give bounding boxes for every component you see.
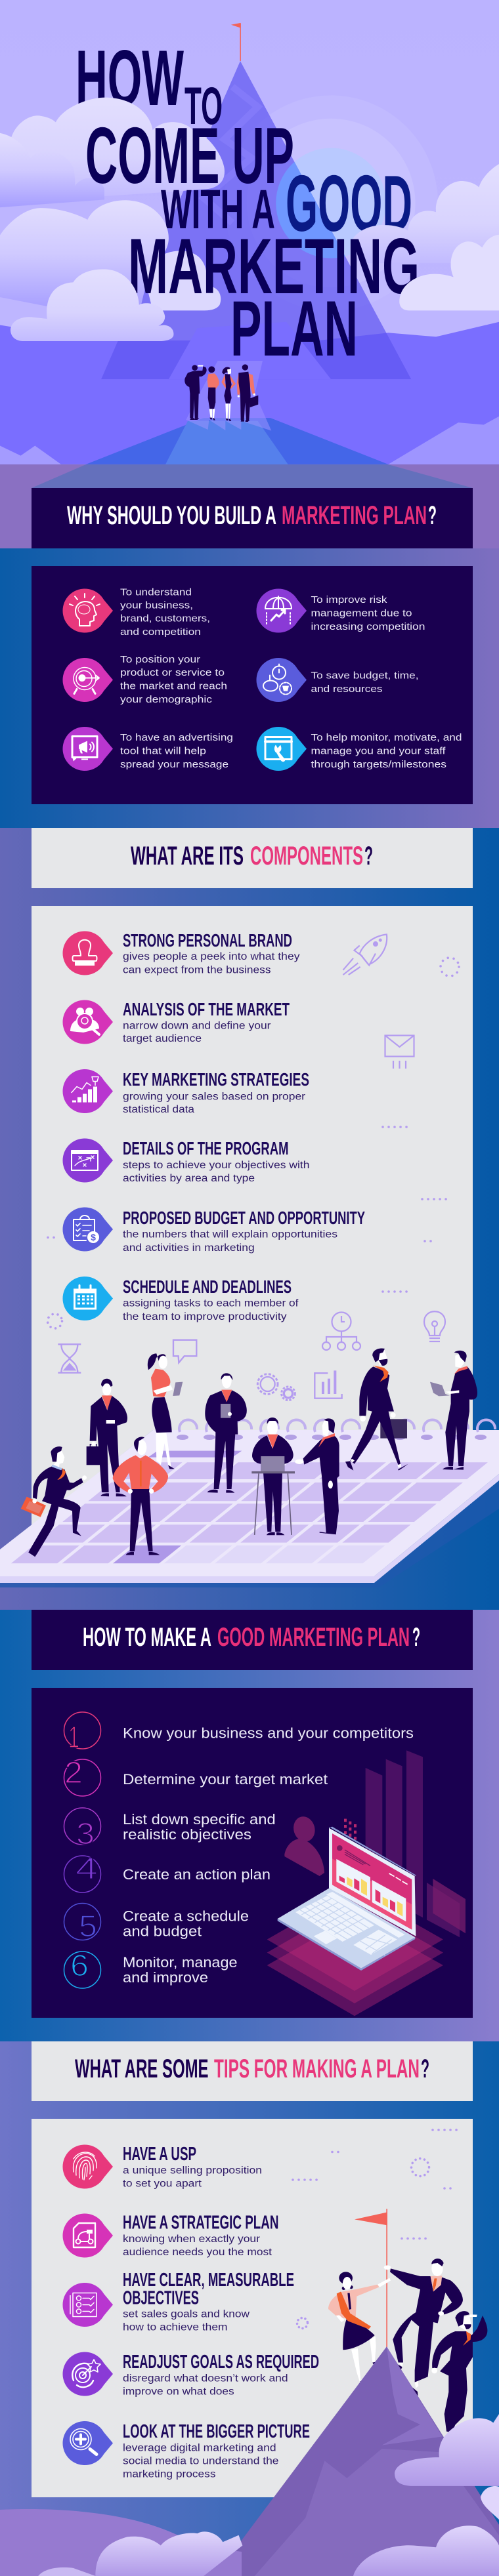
tip: strategic plan <box>63 2212 278 2258</box>
component text: statistical data <box>123 1104 194 1115</box>
reason text: To help monitor, motivate, and <box>311 732 462 743</box>
clouds: lower left and right <box>11 235 499 341</box>
step 6 <box>64 1948 238 1988</box>
component text: growing your sales based on proper <box>123 1092 305 1102</box>
icon: rocket <box>343 934 387 975</box>
tip text: knowing when exactly your <box>123 2234 260 2245</box>
component text: the team to improve productivity <box>123 1311 287 1322</box>
step 6: Monitor, manage <box>123 1954 238 1971</box>
tip text <box>123 2270 294 2333</box>
step 4: 4 <box>76 1851 98 1885</box>
component text: steps to achieve your objectives with <box>123 1160 310 1171</box>
step 2 <box>64 1755 328 1796</box>
panel: components <box>32 906 473 1525</box>
component text: can expect from the business <box>123 964 271 976</box>
calendar platform <box>0 1420 499 1587</box>
tip text <box>123 2421 310 2480</box>
spiral binding rings <box>177 1420 495 1440</box>
tip: measurable objectives <box>63 2270 294 2333</box>
component: details of the program <box>63 1138 310 1184</box>
tip text: set sales goals and know <box>123 2309 250 2320</box>
reason text <box>311 670 419 695</box>
tip: readjust goals <box>63 2352 319 2397</box>
reason text: spread your message <box>120 759 228 770</box>
heading: what are its components: ? <box>364 842 373 870</box>
background band: purple strip under hero <box>0 464 499 548</box>
icon: org chart with clock <box>322 1312 360 1350</box>
tip text: LOOK AT THE BIGGER PICTURE <box>123 2421 310 2442</box>
bottom hill <box>0 2509 242 2576</box>
background band: section 3 gradient <box>0 1610 499 2041</box>
calendar shadow <box>0 1481 499 1587</box>
laptop screen <box>329 1827 416 1936</box>
step 3 <box>64 1808 276 1850</box>
tip text: leverage digital marketing and <box>123 2443 276 2453</box>
flag <box>355 2209 387 2348</box>
people and flag on summit <box>328 2209 463 2396</box>
step 4: Create an action plan <box>123 1866 271 1883</box>
man shading eyes <box>184 365 207 420</box>
component: strong personal brand <box>63 930 300 976</box>
icon: rising bars with trophy <box>63 1069 113 1113</box>
calendar grid <box>11 1451 488 1563</box>
icon: flow document <box>63 2213 113 2258</box>
icon: umbrella and arrow <box>256 589 307 632</box>
hero scene: sky, sun and mountain <box>0 0 499 464</box>
heading: what are some tips: ? <box>421 2055 429 2083</box>
component text: KEY MARKETING STRATEGIES <box>123 1069 309 1090</box>
heading: why should you build a marketing plan: WHY SHOULD YOU BUILD A <box>67 501 276 530</box>
reason: advertising tool <box>63 727 233 771</box>
reason text: the market and reach <box>120 681 227 691</box>
step 3: List down specific and <box>123 1811 276 1828</box>
tip text: to set you apart <box>123 2178 202 2190</box>
icon: bar chart <box>315 1370 342 1399</box>
reason text: To have an advertising <box>120 732 233 743</box>
clouds: middle left and right <box>0 164 499 310</box>
man shaking hands <box>295 1418 339 1534</box>
heading: what are its components: COMPONENTS <box>250 842 363 870</box>
step 1 <box>64 1712 414 1754</box>
tip text <box>123 2352 319 2397</box>
man walking with briefcase <box>345 1349 408 1471</box>
tip text <box>123 2144 262 2190</box>
icon: strategy board <box>63 1139 113 1182</box>
reason text <box>120 586 210 638</box>
icon: magnifier with plus <box>63 2421 113 2465</box>
woman with tablet <box>148 1353 183 1469</box>
component text: gives people a peek into what they <box>123 951 300 962</box>
component: schedule and deadlines <box>63 1277 299 1322</box>
heading: why should you build a marketing plan: ? <box>428 501 437 530</box>
reason text: To position your <box>120 654 200 665</box>
title: HOW TO: HOW <box>76 34 184 122</box>
trapezoid continuation of hill <box>32 464 473 488</box>
title: HOW TO: TO <box>184 77 223 136</box>
reason text: your business, <box>120 600 193 611</box>
title: HOW TO <box>76 34 223 136</box>
component text: assigning tasks to each member of <box>123 1298 299 1309</box>
reason text: To understand <box>120 586 192 598</box>
background band: section 1 gradient <box>0 548 499 828</box>
man with briefcase <box>237 364 258 422</box>
reason text <box>311 594 425 632</box>
reason text: management due to <box>311 607 412 619</box>
component text: PROPOSED BUDGET AND OPPORTUNITY <box>123 1208 365 1228</box>
calendar top <box>0 1430 499 1576</box>
component text: the numbers that will explain opportunities <box>123 1229 337 1240</box>
reason text: and resources <box>311 684 382 695</box>
tip text: HAVE CLEAR, MEASURABLE <box>123 2270 294 2291</box>
component text: ANALYSIS OF THE MARKET <box>123 999 290 1019</box>
component: analysis of the market <box>63 999 290 1044</box>
foreground mountain band <box>0 322 499 464</box>
icon: stamp <box>63 931 113 975</box>
tip text: social media to understand the <box>123 2456 278 2466</box>
tip text: a unique selling proposition <box>123 2165 262 2177</box>
icon: fingerprint <box>63 2145 113 2188</box>
tip text: improve on what does <box>123 2386 234 2397</box>
icon: envelope <box>385 1035 414 1069</box>
clouds: upper left <box>0 98 225 207</box>
bottom and side clouds <box>38 2414 499 2576</box>
reason text: product or service to <box>120 667 225 678</box>
hero hill <box>86 418 388 464</box>
component text <box>123 1138 310 1184</box>
panel: how to make steps <box>32 1688 473 2018</box>
tip text: disregard what doesn’t work and <box>123 2373 288 2384</box>
icon: gears <box>257 1374 295 1400</box>
icon: clipboard with dollar: $ <box>91 1232 96 1242</box>
reason text: To save budget, time, <box>311 670 419 681</box>
component text: target audience <box>123 1033 202 1044</box>
step 6: and improve <box>123 1969 208 1986</box>
tip text: OBJECTIVES <box>123 2288 199 2309</box>
section header: how to make: ? <box>412 1623 420 1652</box>
tip: bigger picture <box>63 2421 310 2480</box>
team on calendar: right group <box>251 1349 477 1535</box>
icon: people and magnifier <box>63 1000 113 1044</box>
background band: section 2 gradient <box>0 828 499 1610</box>
component: proposed budget <box>63 1207 365 1254</box>
reason text <box>120 654 227 705</box>
step 3: realistic objectives <box>123 1826 251 1843</box>
component text: and activities in marketing <box>123 1242 255 1254</box>
decorative dots and rings in tips panel <box>293 2130 462 2329</box>
cloud: bottom left <box>38 2567 95 2576</box>
man with tablet <box>205 1373 247 1493</box>
side hills <box>0 417 499 464</box>
background band: section 4 gradient <box>0 2041 499 2576</box>
component text: STRONG PERSONAL BRAND <box>123 930 292 951</box>
tip text: how to achieve them <box>123 2322 227 2333</box>
heading: what are its components: WHAT ARE ITS <box>131 842 244 870</box>
reason text: through targets/milestones <box>311 759 446 770</box>
tip text: audience needs you the most <box>123 2247 272 2258</box>
man running with book <box>21 1446 87 1557</box>
mountain <box>101 61 411 379</box>
reason text <box>120 732 233 770</box>
component text: activities by area and type <box>123 1173 255 1184</box>
reason text: increasing competition <box>311 621 425 632</box>
person silhouette backdrop <box>284 1814 324 1876</box>
icon: target <box>63 658 113 702</box>
man at laptop stand <box>251 1418 295 1535</box>
title: MARKETING PLAN <box>128 222 420 373</box>
component text <box>123 1208 365 1254</box>
step 1: 1 <box>68 1720 79 1754</box>
section header: why build a plan <box>32 488 473 548</box>
group of four people on hill <box>184 361 271 431</box>
reason: understand your business <box>63 586 210 638</box>
reason text: your demographic <box>120 694 213 705</box>
step 5: and budget <box>123 1923 202 1939</box>
icon: megaphone screen <box>63 727 113 771</box>
component text <box>123 1277 299 1322</box>
floor layers <box>267 1889 443 2016</box>
step 5: Create a schedule <box>123 1908 249 1925</box>
step 4 <box>64 1851 271 1892</box>
summit mountain <box>215 2346 499 2576</box>
reason text: brand, customers, <box>120 613 210 624</box>
reason text: and competition <box>120 626 201 638</box>
tip text <box>123 2212 278 2258</box>
tip: have a USP <box>63 2144 262 2190</box>
tip text: HAVE A USP <box>123 2144 196 2165</box>
component text <box>123 930 300 976</box>
icon: chat bubble <box>173 1340 196 1362</box>
cloud: right edge <box>481 2486 499 2520</box>
step 3: 3 <box>76 1816 95 1850</box>
icon: checklist <box>63 2283 113 2327</box>
sun rings <box>224 95 438 311</box>
component text <box>123 1069 309 1115</box>
component text: narrow down and define your <box>123 1021 271 1031</box>
step 2: 2 <box>64 1755 83 1789</box>
laptop illustration <box>267 1750 466 2016</box>
cloud: bottom centre <box>95 2531 242 2576</box>
team on calendar: left group <box>21 1353 247 1557</box>
icon: wrench window <box>256 727 307 771</box>
component text: DETAILS OF THE PROGRAM <box>123 1138 289 1158</box>
heading: what are some tips <box>75 2055 429 2083</box>
icon: clipboard with dollar <box>63 1207 113 1252</box>
decorative dots and rings <box>47 958 459 1328</box>
panel: tips <box>32 2119 473 2497</box>
reason: position product <box>63 654 227 705</box>
section header: components <box>32 828 473 888</box>
icon: target with star <box>63 2352 113 2396</box>
tip text: marketing process <box>123 2469 216 2480</box>
man with laptop <box>430 1351 477 1470</box>
icon: calendar <box>63 1277 113 1320</box>
step 6: 6 <box>70 1948 89 1982</box>
flag on peak <box>231 23 241 61</box>
reason text: To improve risk <box>311 594 387 605</box>
man with briefcase <box>87 1379 127 1496</box>
reason text: manage you and your staff <box>311 745 446 757</box>
man with beard looking out <box>431 2311 487 2432</box>
title: MARKETING PLAN: PLAN <box>230 285 358 373</box>
grid rows <box>11 1462 488 1563</box>
component: key marketing strategies <box>63 1069 309 1115</box>
component text: SCHEDULE AND DEADLINES <box>123 1277 292 1297</box>
reason: risk management <box>256 589 425 632</box>
icon: light bulb <box>424 1311 445 1341</box>
reason: save budget <box>256 658 419 702</box>
step 5 <box>64 1904 249 1943</box>
cards backdrop <box>427 1879 466 1937</box>
panel: reasons to build a plan <box>32 566 473 804</box>
laptop base <box>278 1888 415 1971</box>
heading: how to make a good marketing plan <box>83 1623 420 1652</box>
reason text: tool that will help <box>120 745 206 757</box>
icon: brain head <box>63 589 113 632</box>
step 1: Know your business and your competitors <box>123 1725 414 1741</box>
calendar side <box>0 1474 499 1583</box>
heading: how to make a good marketing plan: HOW TO MAKE A <box>83 1623 211 1652</box>
tip text: HAVE A STRATEGIC PLAN <box>123 2212 278 2233</box>
man holding flag <box>384 2259 463 2396</box>
woman in dark dress <box>221 367 236 421</box>
cloud: right upper <box>395 2414 499 2486</box>
cloud: bottom right <box>353 2525 499 2576</box>
chart columns backdrop <box>366 1750 423 1917</box>
title: COME UP, WITH A GOOD <box>85 111 412 248</box>
section header: how to make <box>32 1610 473 1670</box>
woman with sash <box>328 2272 391 2390</box>
step 2: Determine your target market <box>123 1771 328 1788</box>
tip text: READJUST GOALS AS REQUIRED <box>123 2352 319 2373</box>
reason: monitor and motivate <box>256 727 462 771</box>
woman in coral blouse <box>207 366 219 420</box>
icon: hourglass <box>58 1344 81 1373</box>
pink squares backdrop <box>344 1819 357 1840</box>
title: COME UP, WITH A GOOD: WITH A <box>161 178 275 240</box>
man in coral shirt <box>113 1437 168 1555</box>
step 5: 5 <box>79 1909 97 1943</box>
title: COME UP, WITH A GOOD: COME UP <box>85 111 294 200</box>
component text <box>123 999 290 1044</box>
section header: tips <box>32 2041 473 2101</box>
reason text <box>311 732 462 770</box>
icon: stopwatch, piggy bank, cart <box>256 658 307 702</box>
heading: what are some tips: WHAT ARE SOME <box>75 2055 209 2083</box>
